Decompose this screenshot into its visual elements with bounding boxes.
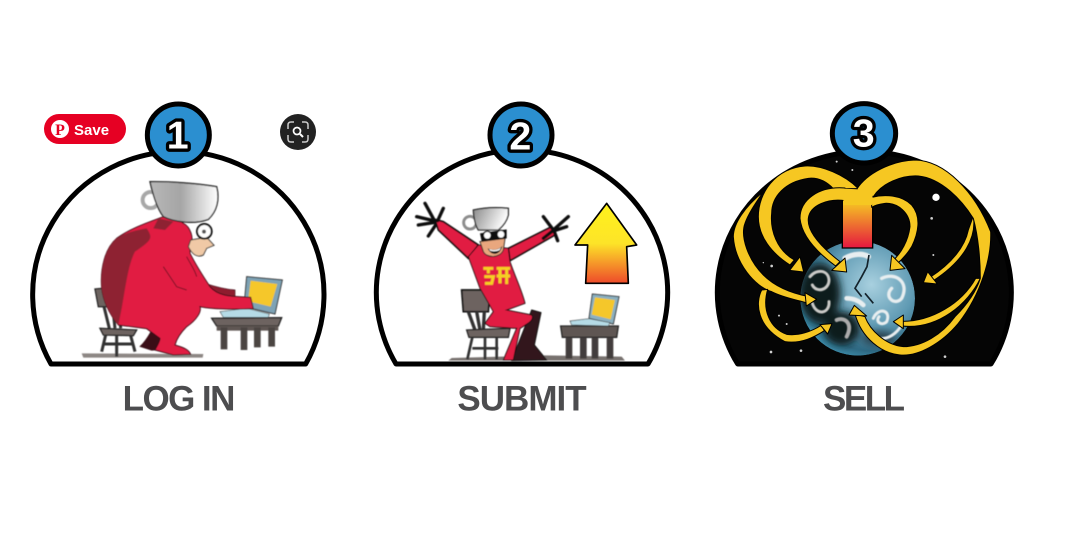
panel: step 1 log in	[33, 104, 324, 418]
arrow: inner left lobe	[800, 188, 847, 272]
visual search lens icon	[280, 114, 316, 150]
chest emblem	[483, 268, 510, 284]
number badge 1	[147, 104, 209, 166]
black space dome	[717, 151, 1011, 364]
pinterest save button	[44, 114, 126, 144]
illustration: figure at laptop	[82, 182, 282, 358]
number badge 2	[490, 104, 552, 166]
arrow: right lower branch	[893, 278, 980, 329]
column flare	[843, 189, 873, 205]
number badge 2: 2	[509, 114, 531, 158]
laptop	[570, 294, 619, 326]
laptop	[220, 277, 282, 317]
illustration: cheering figure	[417, 203, 625, 361]
dome outline	[33, 152, 324, 364]
arrow: outer left to lower globe	[733, 192, 817, 306]
stars	[763, 161, 946, 358]
arrow: inner right lobe	[872, 196, 918, 270]
upload arrow	[575, 203, 637, 283]
dome outline	[376, 150, 668, 364]
label: submit: SUBMIT	[457, 379, 587, 418]
panel: step 3 sell	[717, 104, 1011, 418]
cup hat	[143, 182, 218, 222]
arrow: lower left loop	[758, 289, 832, 342]
number badge 1: 1	[167, 113, 189, 157]
label: log in: LOG IN	[123, 379, 235, 418]
character: arms, hands, torso and legs	[417, 203, 568, 361]
stool	[95, 288, 137, 357]
head with cup hat	[464, 208, 508, 256]
earth globe	[799, 241, 915, 356]
arrow: main left lobe	[758, 166, 858, 272]
number badge 3	[832, 104, 896, 163]
number badge 3: 3	[853, 112, 875, 156]
arrow: main right band to globe bottom	[849, 160, 991, 355]
character body	[101, 217, 253, 355]
panel: step 2 submit	[376, 104, 668, 418]
table	[212, 318, 282, 350]
face and goggle	[188, 224, 214, 256]
pinterest save button: P	[55, 122, 65, 139]
chair	[462, 290, 510, 359]
table	[561, 326, 618, 359]
radiating sales arrows	[733, 160, 991, 355]
infographic: three steps	[30, 101, 1014, 411]
arrow: right thin branch	[923, 216, 974, 284]
pinterest save button: Save	[74, 122, 109, 139]
central column	[842, 190, 873, 248]
label: sell: SELL	[823, 379, 905, 418]
